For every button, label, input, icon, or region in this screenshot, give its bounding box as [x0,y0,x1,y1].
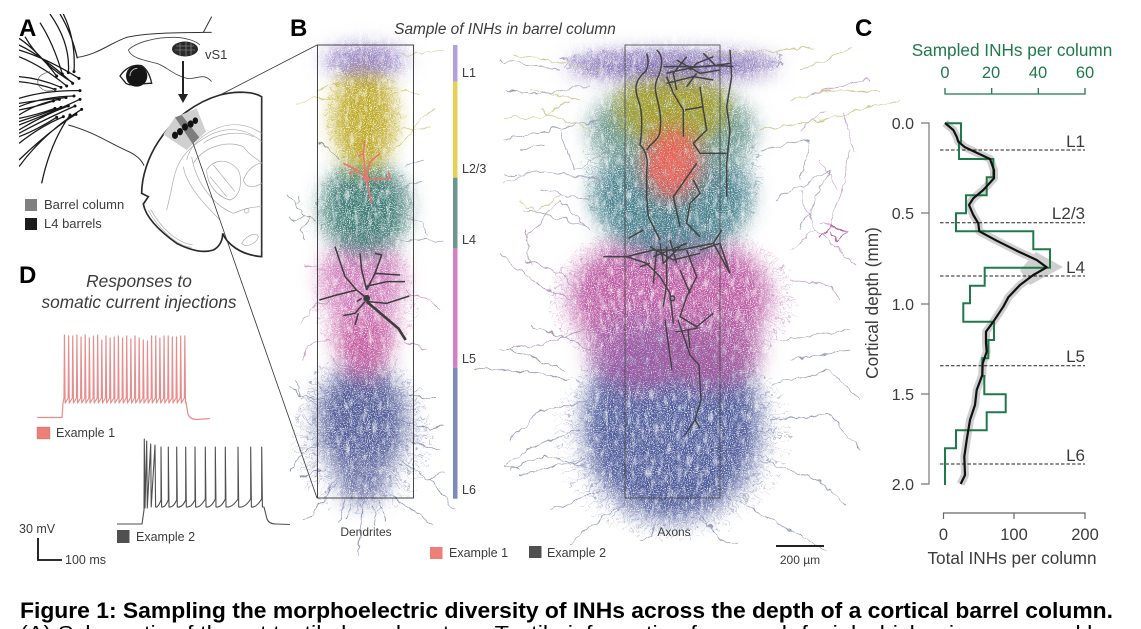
panel: C cell density chart [855,15,1112,568]
zoom lines from column to panel B [193,45,317,498]
layer labels: L1 [1066,132,1085,151]
panel letter A: A [19,15,36,42]
top axis: sampled INHs [912,40,1112,94]
layer 2/3 axons [618,72,726,144]
top axis: sampled INHs: Sampled INHs per column [912,40,1112,60]
example 2 dendrites (dark) [319,247,409,340]
layer labels: L2/3 [462,162,486,176]
layer labels: L5 [462,352,476,366]
dendrites column box [318,45,414,498]
layer labels [1052,132,1085,465]
legend: barrel column: Barrel column [44,197,124,212]
vS1 label: vS1 [205,47,227,62]
axons column box [625,45,720,498]
layer 5 dendrites [320,238,405,380]
layer labels: L6 [1066,446,1085,465]
bottom axis: total INHs: 0 [939,526,948,544]
panel: A rat whisker and barrel schematic [19,14,262,257]
dendrite cloud [288,46,455,556]
layer labels: L4 [462,233,476,247]
layer labels [462,66,486,497]
example 1 dendrites (red) [343,140,390,203]
layer 5 axons [567,232,777,390]
left axis: cortical depth: Cortical depth (mm) [862,227,882,379]
bottom axis: total INHs: 100 [1000,526,1028,544]
stray dendrite branches [288,50,455,556]
scale bar: 30 mV and 100 ms: 30 mV [19,522,56,536]
panel B title: Sample of INHs in barrel column [394,21,616,38]
scale bar: 30 mV and 100 ms: 100 ms [65,553,106,567]
layer 6 axons [568,330,776,525]
stray axon branches [475,47,975,550]
bottom axis: total INHs: Total INHs per column [927,548,1097,568]
layer labels: L6 [462,483,476,497]
scale bar: 30 mV and 100 ms [19,522,106,567]
axon cloud [475,47,975,550]
layer colour bar [453,45,458,499]
layer 2/3 dendrites [334,63,394,173]
panel letter D: D [19,262,36,289]
rat head outline [68,17,212,166]
top axis: sampled INHs: 20 [982,64,1000,82]
legend: example 2: Example 2 [547,546,606,560]
left axis: cortical depth [862,116,929,494]
trace: example 2 [117,439,290,524]
arrow [178,61,188,103]
layer 4 dendrites [321,162,409,254]
left axis: cortical depth: 2.0 [892,477,914,494]
panel D title: somatic current injections [42,292,237,312]
icon: barrel cortex patch [172,42,198,56]
legend: example 1: Example 1 [449,546,508,560]
layer labels: L4 [1066,258,1085,277]
bottom axis: total INHs [927,513,1099,568]
gray confidence band [945,123,1063,484]
panel letter C: C [855,15,872,42]
left axis: cortical depth: 1.0 [892,297,914,314]
trace: example 1 [37,335,210,420]
green histogram [945,123,1050,485]
example 1 axon (red cluster) [644,127,700,199]
panel: B sampled INH morphologies [288,15,975,567]
layer 1 dendrites [323,46,407,74]
layer 4 axons [588,84,756,256]
layer labels: L1 [462,66,476,80]
left axis: cortical depth: 0.5 [892,206,914,223]
panel D title [42,271,237,312]
top axis: sampled INHs: 40 [1029,64,1047,82]
figure caption heading: Figure 1: Sampling the morphoelectric diversity of INHs across the depth of a cortical barrel column. [20,598,1113,623]
panel D title: Responses to [86,271,192,291]
top axis: sampled INHs: 60 [1076,64,1094,82]
scale bar 200 um: 200 µm [780,553,820,567]
layer 6 dendrites [304,364,420,504]
black density curve [945,123,1047,484]
legend: L4 barrels: L4 barrels [44,216,102,231]
left axis: cortical depth: 1.5 [892,387,914,404]
brain slice [142,92,262,257]
left axis: cortical depth: 0.0 [892,116,914,133]
icon: eye [120,65,152,87]
bottom axis: total INHs: 200 [1071,526,1099,544]
example 2 axon (dark) [603,50,733,327]
panel: D electrophysiology traces [19,262,290,567]
layer boundary dashed lines [940,150,1085,464]
legend: example 1 trace: Example 1 [56,426,115,440]
box label: Dendrites: Dendrites [340,525,392,539]
layer labels: L2/3 [1052,204,1085,223]
scale bar 200 um [776,546,824,567]
legend: example 2 trace: Example 2 [136,530,195,544]
box label: Axons: Axons [657,525,691,539]
panel letter B: B [290,15,307,42]
layer 1 axons [567,52,777,80]
top axis: sampled INHs: 0 [940,64,950,82]
whiskers [19,14,83,183]
layer labels: L5 [1066,347,1085,366]
